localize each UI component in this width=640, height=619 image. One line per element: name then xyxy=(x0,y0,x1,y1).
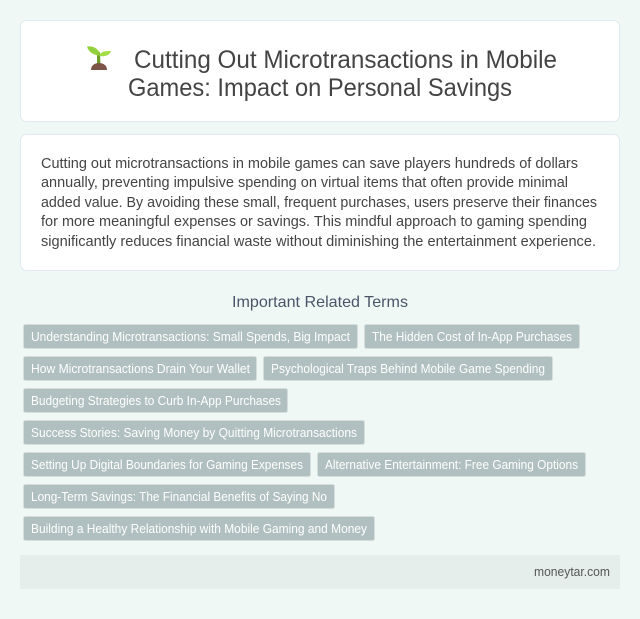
tag: Budgeting Strategies to Curb In-App Purchases xyxy=(31,394,281,408)
tag xyxy=(318,452,586,476)
icon: sprout xyxy=(87,46,111,70)
panel: summary paragraph: significantly reduces financial waste without diminishing the entertainment experience. xyxy=(41,234,596,250)
panel: summary paragraph: for more meaningful expenses or savings. This mindful approach to gaming spending xyxy=(41,214,587,230)
panel: summary paragraph: annually, preventing impulsive spending on virtual items that often provide minimal xyxy=(41,175,568,191)
tag: Understanding Microtransactions: Small Spends, Big Impact xyxy=(31,330,351,344)
tag xyxy=(24,388,288,412)
panel: title card xyxy=(20,20,620,122)
tag: Long-Term Savings: The Financial Benefits of Saying No xyxy=(31,490,327,504)
panel: summary paragraph: Cutting out microtransactions in mobile games can save players hundreds of dollars xyxy=(41,156,578,172)
tag: The Hidden Cost of In-App Purchases xyxy=(372,330,572,344)
footer xyxy=(20,555,620,589)
tag xyxy=(24,452,310,476)
tag xyxy=(24,420,364,444)
tag: Psychological Traps Behind Mobile Game Spending xyxy=(271,362,545,376)
tag: Building a Healthy Relationship with Mobile Gaming and Money xyxy=(31,522,368,536)
tag: Success Stories: Saving Money by Quitting Microtransactions xyxy=(31,426,357,440)
title xyxy=(128,46,557,102)
title: Games: Impact on Personal Savings xyxy=(128,74,512,102)
title: Cutting Out Microtransactions in Mobile xyxy=(134,46,557,74)
tag: Setting Up Digital Boundaries for Gaming Expenses xyxy=(31,458,303,472)
panel: summary paragraph: added value. By avoiding these small, frequent purchases, users preserve their finances xyxy=(41,195,597,211)
footer: moneytar.com xyxy=(534,565,610,579)
tag xyxy=(24,516,374,540)
tag: How Microtransactions Drain Your Wallet xyxy=(31,362,251,376)
tag xyxy=(364,324,580,348)
tag xyxy=(24,356,256,380)
tag xyxy=(24,324,358,348)
heading: related terms: Important Related Terms xyxy=(232,294,408,311)
tag: Alternative Entertainment: Free Gaming Options xyxy=(325,458,578,472)
tag xyxy=(24,484,334,508)
panel: summary paragraph xyxy=(20,134,620,270)
tag xyxy=(264,356,552,380)
